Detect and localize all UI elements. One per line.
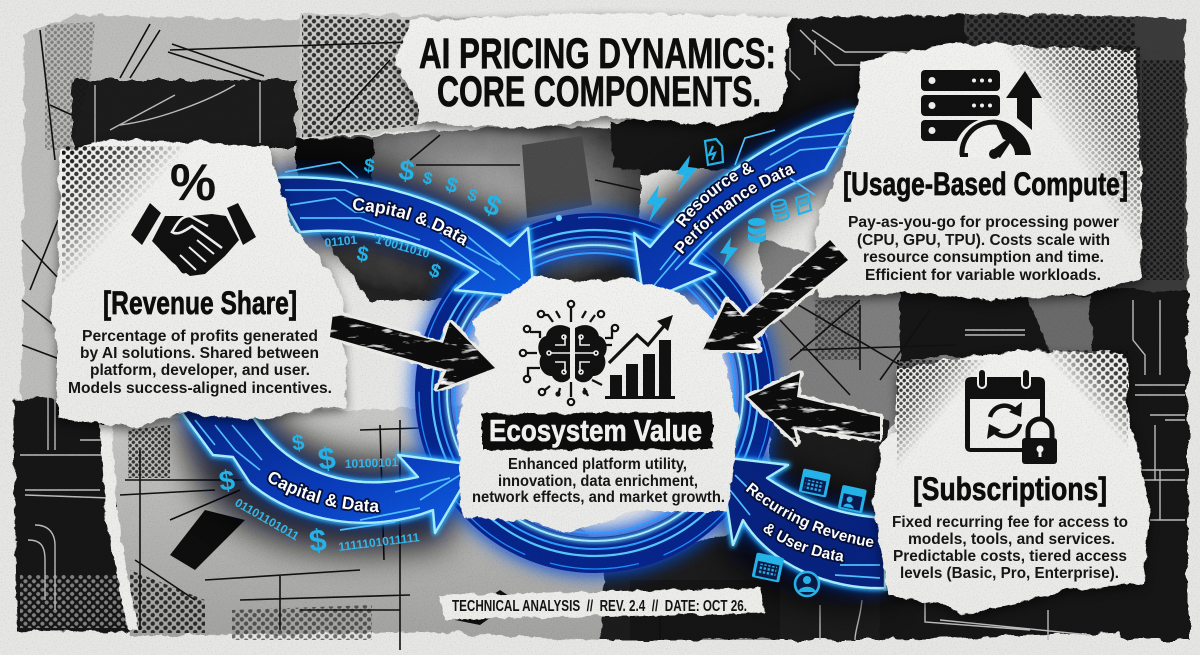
title panel (395, 13, 791, 132)
text: usage-based compute description: (CPU, GPU, TPU). Costs scale with (857, 232, 1110, 249)
label: capital and data: Capital & Data (266, 470, 381, 514)
title text: AI PRICING DYNAMICS: (419, 30, 776, 78)
icon: file (705, 139, 723, 165)
heading: subscriptions: [Subscriptions] (913, 471, 1107, 507)
text: revenue share description: Models success-aligned incentives. (68, 380, 332, 397)
cyan data symbols around the flows: $ (362, 155, 376, 178)
dark halo around the flows (170, 95, 890, 605)
cyan data symbols around the flows: $ (307, 522, 328, 559)
halftone corners (897, 350, 1128, 470)
arrow: recurring revenue and user data (716, 447, 890, 602)
panel: revenue share (50, 140, 347, 432)
cyan data symbols around the flows: 1111101011111 (338, 530, 421, 554)
cyan data symbols around the flows: $ (426, 260, 444, 283)
text: subscriptions description (892, 514, 1128, 582)
icon: server with gauge and up arrow (921, 70, 1042, 159)
text: revenue share description: by AI solutions. Shared between (80, 345, 319, 362)
arrow: capital and data, bottom left (174, 410, 462, 539)
cyan data symbols around the flows: $ (290, 429, 306, 456)
cyan data symbols around the flows: $ (465, 185, 481, 206)
icon: growth chart (605, 315, 675, 399)
cyan data symbols around the flows: $ (397, 154, 417, 187)
arrow: torn black, subscriptions to centre (748, 373, 880, 443)
arrow: torn black, revenue share to centre (330, 313, 495, 390)
icon: lightning bolts (646, 155, 738, 267)
cyan data symbols around the flows: $ (480, 188, 506, 223)
icon: calendar with refresh and lock (965, 369, 1057, 464)
text: usage-based compute description: Efficient for variable workloads. (865, 267, 1101, 284)
text: subscriptions description: Fixed recurring fee for access to (892, 514, 1128, 531)
cyan data symbols around the flows: 10100101 (345, 455, 399, 471)
halftone corner (1000, 46, 1140, 260)
icon: handshake (131, 203, 256, 276)
text: revenue share description: Percentage of profits generated (82, 328, 318, 345)
label: recurring revenue and user data: & User Data (762, 522, 845, 564)
cyan data symbols around the flows: 01101101011 (233, 495, 302, 543)
arrow: capital and data, top left (274, 161, 546, 306)
text: revenue share description: platform, developer, and user. (90, 362, 310, 379)
label: resource and performance data: Performance Data (672, 164, 797, 256)
cyan data symbols around the flows: 01101 (324, 233, 358, 250)
arrow: torn black, usage compute to centre (703, 240, 848, 350)
icon: databases (748, 194, 811, 243)
halftone corner (62, 146, 190, 290)
title text: CORE COMPONENTS. (437, 68, 761, 116)
footer strip (438, 588, 765, 620)
text: ecosystem value description: innovation, data enrichment, (498, 473, 698, 490)
cyan data symbols around the flows (217, 139, 867, 596)
footer text: TECHNICAL ANALYSIS // REV. 2.4 // DATE: OCT 26. (452, 598, 747, 615)
cyan data symbols around the flows: '1'0011010 (371, 231, 432, 261)
white lip of torn sheet, lower left (100, 425, 138, 630)
heading: revenue share: [Revenue Share] (103, 285, 297, 321)
panel: subscriptions (873, 350, 1150, 619)
text: subscriptions description: Predictable costs, tiered access (893, 548, 1127, 565)
cyan data symbols around the flows: $ (421, 168, 435, 189)
text: revenue share description (68, 328, 332, 397)
text: ecosystem value description (472, 456, 725, 506)
cyan data symbols around the flows: $ (217, 464, 237, 497)
label: capital and data: Capital & Data (351, 196, 468, 248)
icon: calendars and user (752, 468, 867, 596)
cyan data symbols around the flows: $ (443, 173, 461, 198)
title text (419, 30, 776, 116)
heading: ecosystem value on torn black bar: Ecosystem Value (489, 413, 702, 448)
text: subscriptions description: levels (Basic, Pro, Enterprise). (900, 565, 1119, 582)
text: ecosystem value description: network effects, and market growth. (472, 489, 725, 506)
cyan data symbols around the flows: $ (316, 440, 338, 477)
text: usage-based compute description: Pay-as-you-go for processing power (848, 214, 1119, 231)
text: subscriptions description: models, tools, and services. (908, 531, 1115, 548)
icon: percent: % (170, 154, 216, 212)
text: ecosystem value description: Enhanced platform utility, (508, 456, 687, 473)
arrow: resource and performance data, top right (622, 98, 858, 298)
text: usage-based compute description (848, 214, 1119, 284)
icon: ai brain (520, 301, 618, 405)
cyan data symbols around the flows: $ (355, 242, 371, 267)
panel: ecosystem value (458, 277, 738, 533)
label: resource and performance data: Resource & (674, 161, 756, 229)
text: usage-based compute description: resource consumption and time. (863, 249, 1104, 266)
central glowing ring (419, 215, 771, 569)
label: recurring revenue and user data: Recurring Revenue (744, 480, 876, 549)
panel: usage-based compute (814, 43, 1143, 304)
